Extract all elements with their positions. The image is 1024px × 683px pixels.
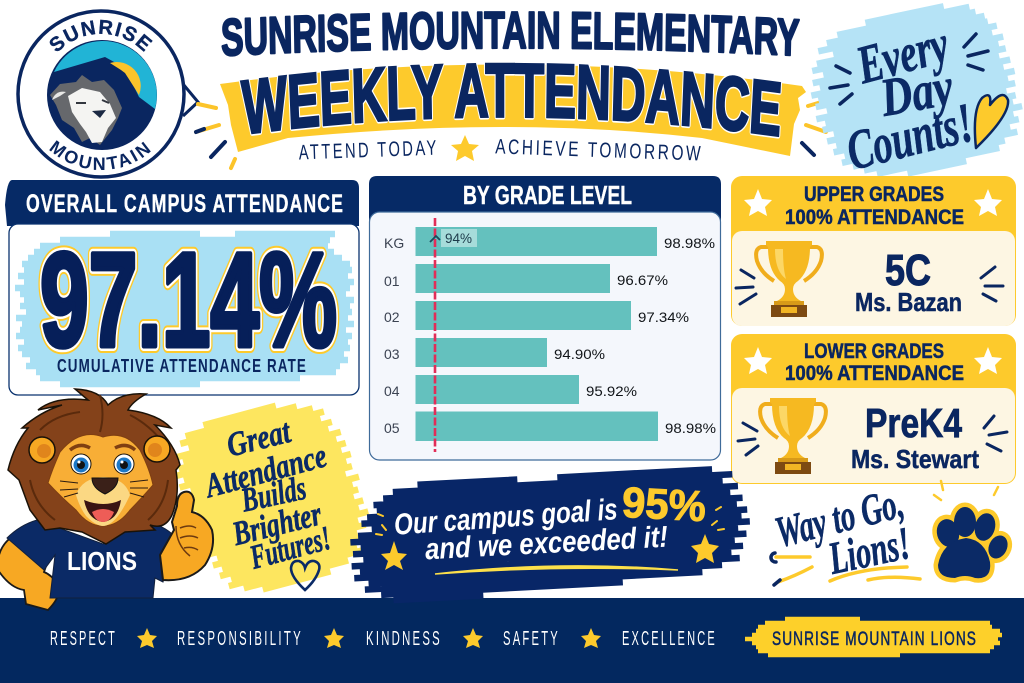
yellow brush: great attendance bbox=[165, 390, 381, 604]
core values: KINDNESS bbox=[366, 628, 442, 650]
panel: lower grades award bbox=[731, 334, 1016, 484]
nose and mouth bbox=[92, 478, 118, 494]
bar chart: 04 bbox=[384, 383, 400, 399]
header sparkle ticks left bbox=[196, 104, 235, 168]
panel: by grade level bbox=[369, 176, 721, 460]
way to go lions: Way to Go, bbox=[770, 478, 908, 557]
icon: trophy bbox=[756, 241, 822, 317]
winner: Ms. Stewart bbox=[851, 444, 979, 474]
icon: outline heart bbox=[291, 561, 319, 590]
blue brush bbox=[15, 234, 354, 384]
icon: stars bbox=[744, 347, 1002, 374]
yellow title banner bbox=[220, 64, 806, 156]
icon: trophy bbox=[760, 398, 826, 474]
bar chart: 05 bbox=[384, 420, 400, 436]
winner bbox=[851, 400, 979, 474]
big number bbox=[40, 226, 337, 375]
heading: 100% ATTENDANCE bbox=[785, 206, 964, 229]
yellow swooshes bbox=[776, 557, 920, 582]
motivational text: Attendance bbox=[200, 437, 331, 506]
core values: RESPECT bbox=[50, 628, 117, 650]
goal text line one: Our campus goal is bbox=[393, 493, 619, 542]
header sparkle ticks right bbox=[802, 100, 828, 155]
panel: overall campus attendance bbox=[5, 180, 359, 395]
title: school name: SUNRISE MOUNTAIN ELEMENTARY bbox=[221, 11, 800, 57]
muzzle bbox=[76, 477, 130, 526]
left arm bbox=[0, 535, 59, 610]
motivational text: Futures! bbox=[246, 520, 335, 577]
blue brush: every day counts bbox=[799, 0, 1024, 190]
eyes bbox=[70, 445, 135, 474]
yellow brush with name bbox=[745, 619, 1002, 655]
big number: 97.14% bbox=[40, 226, 337, 375]
tagline: ACHIEVE TOMORROW bbox=[495, 135, 704, 166]
bar chart: 03 bbox=[384, 346, 400, 362]
stars bbox=[137, 628, 601, 648]
big number: 97.14% bbox=[40, 226, 337, 375]
goal marker line: 94% bbox=[445, 231, 472, 246]
heading: UPPER GRADES bbox=[804, 183, 944, 206]
bar chart bbox=[384, 218, 716, 452]
bar chart: 98.98% bbox=[665, 420, 716, 436]
every day counts text: Day bbox=[875, 56, 958, 128]
footer band bbox=[0, 598, 1024, 683]
heading bbox=[785, 340, 964, 385]
tagline bbox=[298, 135, 704, 166]
motivational text: Brighter bbox=[228, 495, 326, 553]
winner: 5C bbox=[885, 246, 931, 295]
navy brush: campus goal bbox=[348, 467, 753, 602]
winner bbox=[855, 246, 962, 317]
every day counts text bbox=[840, 13, 980, 183]
motivational text: Great bbox=[223, 413, 295, 464]
winner: PreK4 bbox=[865, 400, 962, 446]
shirt bbox=[7, 520, 175, 598]
winner: Ms. Bazan bbox=[855, 287, 962, 317]
icon: heart bbox=[975, 95, 1008, 148]
bar chart: KG bbox=[384, 235, 404, 251]
heading: OVERALL CAMPUS ATTENDANCE bbox=[26, 190, 344, 218]
title: weekly attendance: WEEKLY ATTENDANCE bbox=[239, 64, 782, 139]
logo: Sunrise Mountain badge: SUNRISE bbox=[50, 20, 153, 52]
mascot: lion with thumbs up: LIONS bbox=[67, 546, 137, 576]
panel: upper grades award bbox=[731, 176, 1016, 326]
motivational text bbox=[200, 413, 335, 577]
goal text line two: and we exceeded it! bbox=[424, 521, 669, 566]
core values: EXCELLENCE bbox=[622, 628, 717, 650]
bar chart: 98.98% bbox=[664, 235, 715, 251]
big number: 97.14% bbox=[40, 226, 337, 375]
text: WEEKLY ATTENDANCE bbox=[240, 62, 782, 138]
bar chart: 96.67% bbox=[617, 272, 668, 288]
mascot: lion with thumbs up bbox=[0, 389, 213, 610]
sparkle ticks bbox=[830, 34, 988, 104]
way to go lions: Lions! bbox=[823, 517, 915, 584]
goal percent: 95% bbox=[621, 479, 707, 531]
bar chart: 02 bbox=[384, 309, 400, 325]
motivational text: Builds bbox=[237, 470, 309, 520]
bar chart: 94.90% bbox=[554, 346, 605, 362]
tagline: ATTEND TODAY bbox=[298, 137, 439, 164]
bar chart: 01 bbox=[384, 273, 400, 289]
goal marker line bbox=[430, 218, 477, 452]
caption: CUMULATIVE ATTENDANCE RATE bbox=[57, 356, 307, 376]
ears bbox=[29, 437, 55, 463]
mane bbox=[8, 389, 180, 544]
yellow underline bbox=[435, 566, 678, 574]
heading bbox=[785, 183, 964, 229]
way to go lions bbox=[770, 478, 920, 585]
core values: RESPONSIBILITY bbox=[177, 628, 303, 650]
logo: Sunrise Mountain badge: MOUNTAIN bbox=[49, 140, 151, 170]
icon: stars bbox=[744, 189, 1002, 216]
bar chart: 95.92% bbox=[586, 383, 637, 399]
heading: BY GRADE LEVEL bbox=[463, 180, 632, 210]
sparkle ticks bbox=[738, 416, 1007, 455]
sparkle ticks bbox=[736, 267, 1003, 304]
icon: paw print bbox=[934, 481, 1011, 578]
logo: Sunrise Mountain badge bbox=[16, 9, 200, 179]
stars bbox=[381, 534, 719, 570]
core values: SAFETY bbox=[503, 628, 560, 650]
sparkle ticks bbox=[376, 507, 724, 535]
bar chart: 97.34% bbox=[638, 309, 689, 325]
face bbox=[48, 435, 153, 526]
heading: 100% ATTENDANCE bbox=[785, 362, 964, 385]
heading: LOWER GRADES bbox=[804, 340, 944, 363]
every day counts text: Every bbox=[850, 13, 955, 96]
core values bbox=[50, 628, 717, 650]
right arm and thumb bbox=[160, 492, 213, 580]
